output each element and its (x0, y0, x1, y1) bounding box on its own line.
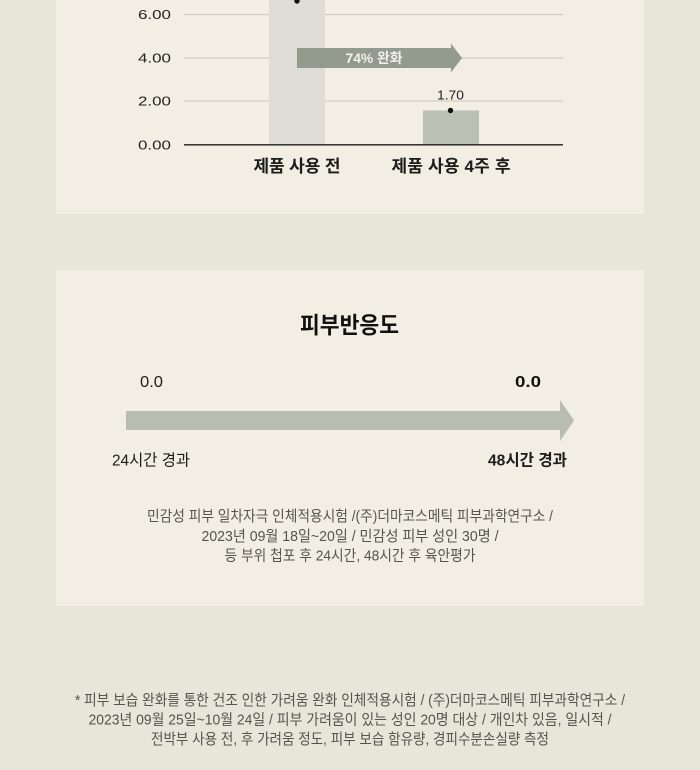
y axis labels: 4.00 (138, 52, 171, 66)
arrow: timeline (126, 400, 574, 441)
label: 48 hours: 48시간 경과 (488, 452, 567, 470)
y axis labels: 6.00 (138, 8, 171, 22)
footnote (75, 692, 626, 748)
value: 48 hours: 0.0 (515, 374, 541, 391)
footnote: * 피부 보습 완화를 통한 건조 인한 가려움 완화 인체적용시험 / (주)더마코스메틱 피부과학연구소 / (75, 692, 626, 709)
y axis labels: 0.00 (138, 138, 171, 152)
bar: before use (269, 0, 325, 144)
test note: 민감성 피부 일차자극 인체적용시험 /(주)더마코스메틱 피부과학연구소 / (147, 508, 554, 525)
arrow: 74% relief (297, 44, 462, 72)
footnote: 전박부 사용 전, 후 가려움 정도, 피부 보습 함유량, 경피수분손실량 측정 (151, 731, 549, 748)
value: 24 hours: 0.0 (140, 374, 163, 391)
footnote: 2023년 09월 25일~10월 24일 / 피부 가려움이 있는 성인 20명 대상 / 개인차 있음, 일시적 / (88, 712, 612, 728)
bar: after 4 weeks (423, 110, 479, 144)
category labels: 제품 사용 4주 후 (392, 157, 510, 176)
test note (147, 508, 554, 564)
data point: after 4 weeks (448, 108, 453, 113)
heading: 피부반응도 (300, 312, 399, 338)
category labels: 제품 사용 전 (254, 157, 340, 176)
arrow: 74% relief: 74% 완화 (346, 50, 403, 66)
data point: before use (294, 0, 300, 4)
panel: skin irritation (56, 270, 644, 606)
test note: 2023년 09월 18일~20일 / 민감성 피부 성인 30명 / (202, 528, 499, 545)
value label: 1.70: 1.70 (437, 88, 464, 102)
category labels (254, 157, 510, 176)
panel: bar chart (56, 0, 644, 214)
y axis labels (138, 8, 171, 152)
label: 24 hours: 24시간 경과 (112, 452, 190, 470)
test note: 등 부위 첩포 후 24시간, 48시간 후 육안평가 (224, 548, 476, 564)
y axis labels: 2.00 (138, 94, 171, 108)
